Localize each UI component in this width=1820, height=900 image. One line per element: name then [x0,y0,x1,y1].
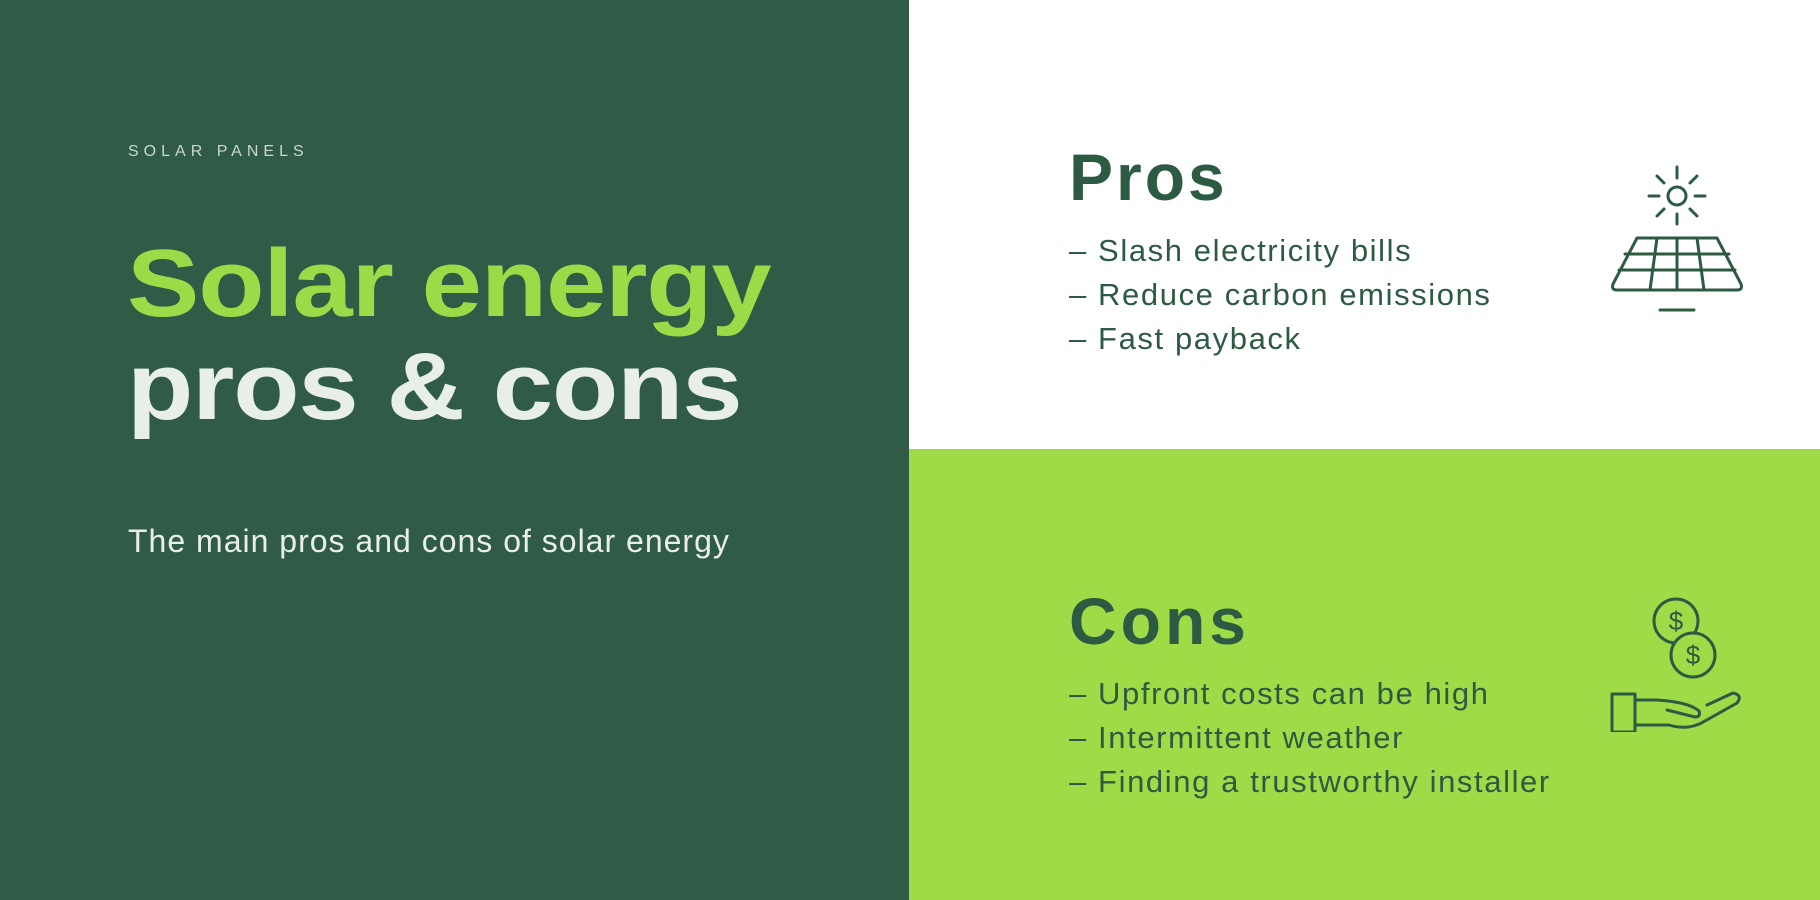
heading: Pros: Pros [1069,140,1228,214]
panel: pros [909,0,1820,449]
icon: solar panel [1611,166,1743,312]
panel: left dark [0,0,909,900]
panel: cons [909,449,1820,900]
eyebrow label: SOLAR PANELS [128,143,309,160]
cons list: – Upfront costs can be high [1069,676,1490,711]
icon: hand with coins [1610,598,1741,732]
cons list: – Intermittent weather [1069,720,1404,755]
cons list: – Finding a trustworthy installer [1069,764,1551,799]
pros list [1069,233,1492,356]
cons list [1069,676,1551,799]
icon: hand with coins: $ [1686,640,1701,670]
pros list: – Reduce carbon emissions [1069,277,1492,312]
title: Solar energy [127,230,771,337]
pros list: – Slash electricity bills [1069,233,1412,268]
icon: hand with coins: $ [1669,606,1684,636]
pros list: – Fast payback [1069,321,1302,356]
title [127,230,771,440]
title: pros & cons [127,333,741,440]
subtitle: The main pros and cons of solar energy [128,523,730,559]
heading: Cons: Cons [1069,584,1250,658]
